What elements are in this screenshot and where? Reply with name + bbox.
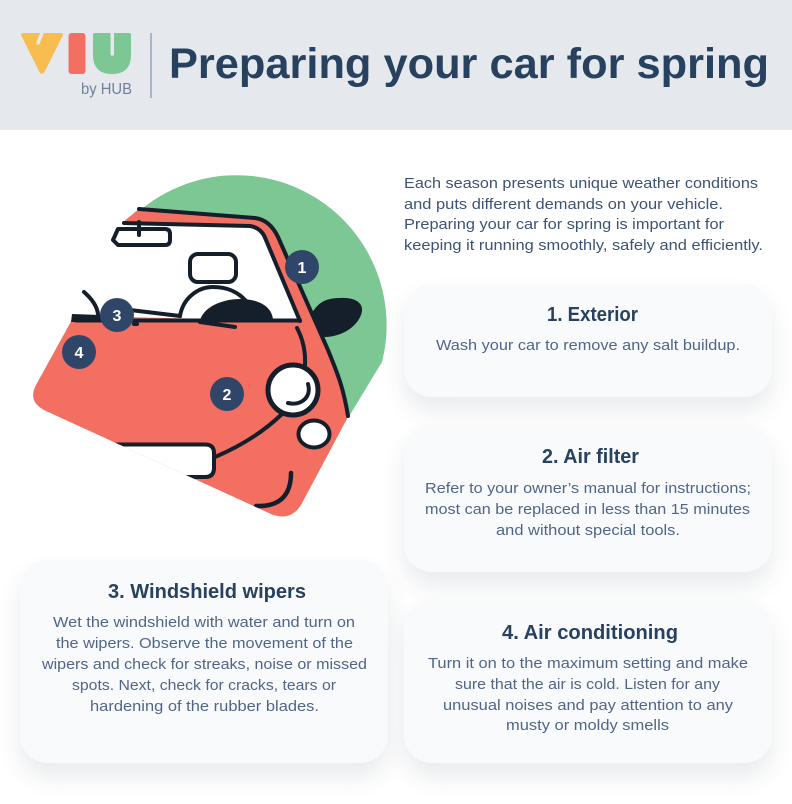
heading: Air conditioning: 4. Air conditioning: [502, 622, 678, 644]
windshield wiper base: [71, 314, 104, 322]
intro text: keeping it running smoothly, safely and efficiently.: [404, 237, 763, 254]
text: Windshield wipers: the wipers. Observe the movement of the: [56, 635, 353, 652]
headrest: [190, 254, 236, 282]
badge 4: 4: [75, 345, 84, 362]
heading: Air filter: 2. Air filter: [542, 446, 639, 468]
heading: Exterior: 1. Exterior: [547, 304, 638, 326]
text: Air filter: and without special tools.: [496, 522, 680, 539]
text: Exterior: Wash your car to remove any salt buildup.: [436, 337, 740, 354]
intro text: Each season presents unique weather conditions: [404, 175, 758, 192]
headlamp: [268, 365, 318, 415]
text: Air filter: most can be replaced in less than 15 minutes: [425, 501, 750, 518]
green location pin background: [143, 175, 387, 418]
text: Windshield wipers: [41, 614, 367, 715]
car outlines: [76, 209, 348, 457]
text: Air conditioning: unusual noises and pay attention to any: [443, 697, 734, 714]
text: Air conditioning: musty or moldy smells: [506, 717, 669, 734]
panel: 2. Air filter: [404, 425, 772, 572]
header divider: [150, 33, 152, 98]
text: Windshield wipers: wipers and check for streaks, noise or missed: [41, 656, 367, 673]
text: Windshield wipers: spots. Next, check for cracks, tears or: [72, 677, 336, 694]
text: Air conditioning: Turn it on to the maximum setting and make: [428, 655, 748, 672]
text: Air filter: Refer to your owner’s manual for instructions;: [425, 480, 751, 497]
logo: VIU by HUB: [21, 33, 132, 98]
panel: 3. Windshield wipers: [20, 560, 388, 763]
text: Windshield wipers: Wet the windshield with water and turn on: [53, 614, 355, 631]
badge 2: 2: [223, 387, 232, 404]
text: Air conditioning: [428, 655, 748, 734]
badge 1: [285, 250, 319, 284]
text: Air conditioning: sure that the air is cold. Listen for any: [455, 676, 721, 693]
header band: [0, 0, 792, 130]
steering dash: [200, 299, 273, 320]
badge 4: [62, 335, 96, 369]
bumper notch: [100, 444, 291, 506]
panel: 4. Air conditioning: [404, 600, 772, 763]
intro text: Preparing your car for spring is important for: [404, 216, 724, 233]
badge 2: [210, 377, 244, 411]
fog light: [298, 420, 330, 448]
text: Windshield wipers: hardening of the rubber blades.: [90, 698, 319, 715]
title: Preparing your car for spring: [169, 40, 769, 88]
heading: Windshield wipers: 3. Windshield wipers: [108, 581, 306, 603]
badge 3: 3: [113, 308, 122, 325]
text: Air filter: [425, 480, 751, 539]
panel: 1. Exterior: [404, 284, 772, 397]
side mirror: [312, 298, 362, 337]
logo: VIU by HUB: by HUB: [81, 81, 132, 98]
intro text: and puts different demands on your vehicle.: [404, 196, 723, 213]
badge 1: 1: [298, 260, 307, 277]
red car body: [33, 208, 349, 517]
car illustration: [33, 175, 387, 516]
badge 3: [100, 298, 134, 332]
rear-view mirror: [113, 222, 170, 245]
